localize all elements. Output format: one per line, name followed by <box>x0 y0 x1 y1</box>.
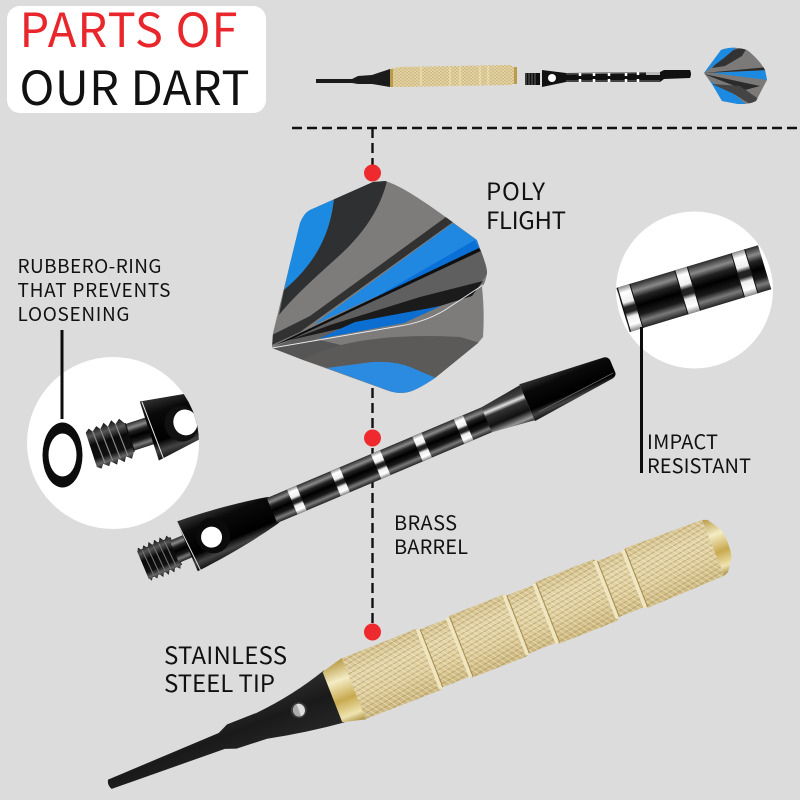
white edge <box>272 285 483 348</box>
dark curved band <box>279 178 387 315</box>
blue bottom <box>327 362 436 393</box>
flight <box>272 178 488 393</box>
title <box>7 0 266 119</box>
label: stainless steel tip: STAINLESS <box>164 636 287 671</box>
collar <box>177 485 284 571</box>
blue top left <box>284 198 334 292</box>
title: OUR DART <box>20 50 250 119</box>
dark wedge near point <box>272 340 345 360</box>
small flight <box>704 48 767 104</box>
blue stripe <box>313 223 480 325</box>
label: brass barrel <box>394 507 468 560</box>
silver section <box>479 385 535 437</box>
red dot: shaft <box>364 430 381 446</box>
hole <box>190 512 236 559</box>
red dot: barrel <box>364 624 381 640</box>
barrel body <box>340 517 725 720</box>
small dart tip <box>316 69 390 87</box>
label: brass barrel: BRASS <box>394 507 457 536</box>
grey band <box>275 251 488 347</box>
dark stripe <box>272 217 453 345</box>
red dot: flight <box>364 164 381 182</box>
dashed leader vertical to flight <box>371 128 374 173</box>
stripes <box>287 415 473 514</box>
label: rubber o-ring: THAT PREVENTS <box>18 276 170 303</box>
label: rubber o-ring <box>18 252 170 327</box>
back ring <box>702 514 739 576</box>
black line <box>275 248 481 345</box>
small barrel <box>390 65 517 87</box>
tip hole <box>288 700 309 721</box>
band rings <box>418 549 646 689</box>
front ring <box>320 658 366 728</box>
tube <box>267 407 493 523</box>
shaft <box>132 342 623 590</box>
lower grey dark <box>303 336 480 378</box>
detail circle: impact resistant tube <box>616 212 773 368</box>
dashed leader vertical to barrel <box>371 388 374 632</box>
threads <box>136 527 198 583</box>
screw close-up <box>86 394 199 469</box>
label: poly flight: POLY <box>486 172 545 207</box>
label: impact resistant: IMPACT <box>647 426 718 455</box>
dashed leader horizontal <box>292 127 800 129</box>
black lens <box>290 281 483 340</box>
label: rubber o-ring: LOOSENING <box>18 300 130 327</box>
label: brass barrel: BARREL <box>394 531 468 560</box>
small shaft <box>525 70 691 87</box>
assembled dart overview <box>316 48 767 104</box>
label: poly flight <box>486 172 566 236</box>
o-ring <box>42 422 82 488</box>
tip cone <box>519 348 621 421</box>
detail circle: o-ring and screw <box>27 357 206 529</box>
blue lower <box>318 306 441 339</box>
label: impact resistant: RESISTANT <box>647 450 751 479</box>
label: impact resistant <box>647 426 751 479</box>
label: stainless steel tip <box>164 636 287 699</box>
label: poly flight: FLIGHT <box>486 201 566 236</box>
leader line to o-ring <box>60 330 64 419</box>
leader line to tube <box>640 327 643 473</box>
barrel and tip <box>96 511 740 800</box>
label: stainless steel tip: STEEL TIP <box>164 664 275 699</box>
label: rubber o-ring: RUBBERO-RING <box>18 252 162 279</box>
black tip <box>98 670 344 800</box>
